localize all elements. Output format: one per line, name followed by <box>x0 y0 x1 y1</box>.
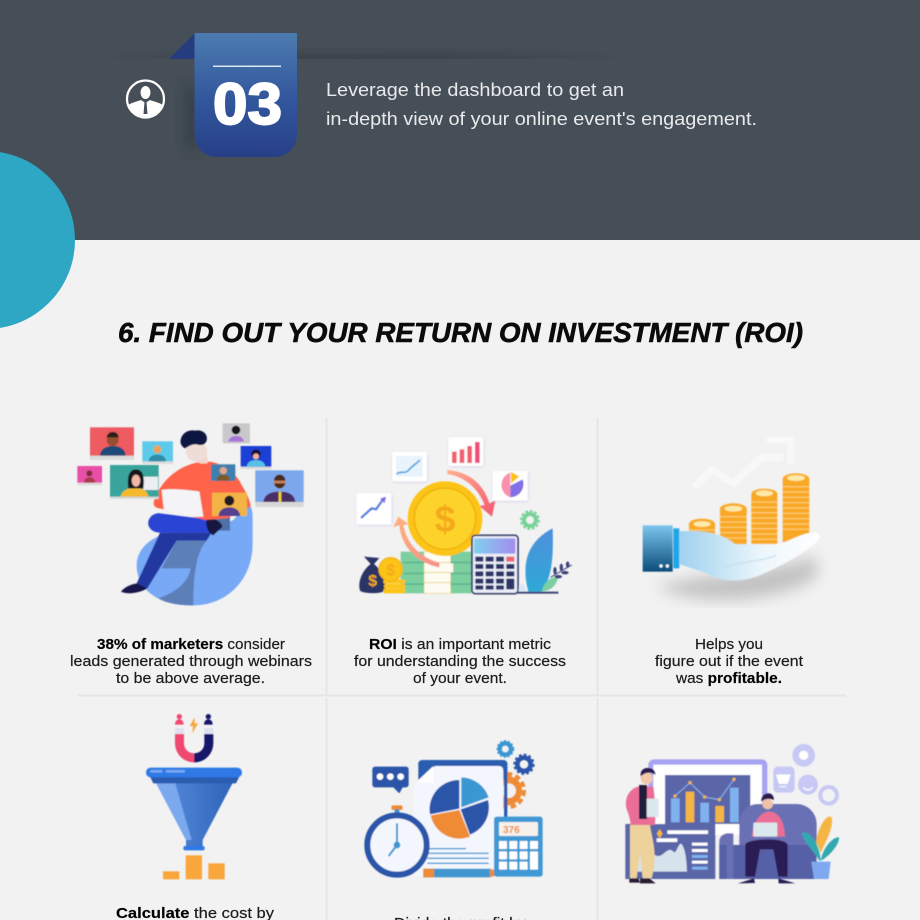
ribbon cast shadow band <box>100 48 630 59</box>
caption 3 <box>655 636 804 687</box>
section title: 6. FIND OUT YOUR RETURN ON INVESTMENT (ROI) <box>118 317 803 348</box>
step 03 description: Leverage the dashboard to get an <box>326 80 624 100</box>
step number: 03 <box>213 72 282 137</box>
illustration: ROI coin, charts, calculator: $ <box>435 497 456 539</box>
caption 1: to be above average. <box>116 670 265 687</box>
caption 3: figure out if the event <box>655 653 804 670</box>
caption 2: for understanding the success <box>354 653 566 670</box>
caption 3: Helps you <box>695 636 763 653</box>
caption 1 <box>70 636 312 687</box>
caption 2: of your event. <box>413 670 507 687</box>
icon: businessman in circle <box>126 80 165 120</box>
illustration: report, stopwatch, calculator: 376 <box>503 825 520 836</box>
caption 1: leads generated through webinars <box>70 653 312 670</box>
decorative teal circle <box>0 151 75 329</box>
caption 2: ROI is an important metric <box>369 636 552 653</box>
step 03 ribbon badge <box>169 33 297 157</box>
illustration: person on beanbag with video call tiles <box>77 423 304 605</box>
header band background <box>0 0 920 240</box>
illustration: ROI coin, charts, calculator: $ <box>368 573 377 590</box>
illustration: analytics dashboard with two people <box>625 744 839 883</box>
illustration: report, stopwatch, calculator <box>367 741 543 877</box>
caption 1: 38% of marketers consider <box>97 636 285 653</box>
illustration: ROI coin, charts, calculator: $ <box>386 562 395 579</box>
illustration: ROI coin, charts, calculator <box>356 437 572 594</box>
step 03 description: in-depth view of your online event's engagement. <box>326 109 757 129</box>
step 03 description <box>326 80 757 129</box>
illustration: hand holding growing coin stacks <box>643 440 820 600</box>
caption 2 <box>354 636 566 687</box>
illustration: funnel with magnet and coins <box>146 714 242 879</box>
caption 3: was profitable. <box>675 670 782 687</box>
